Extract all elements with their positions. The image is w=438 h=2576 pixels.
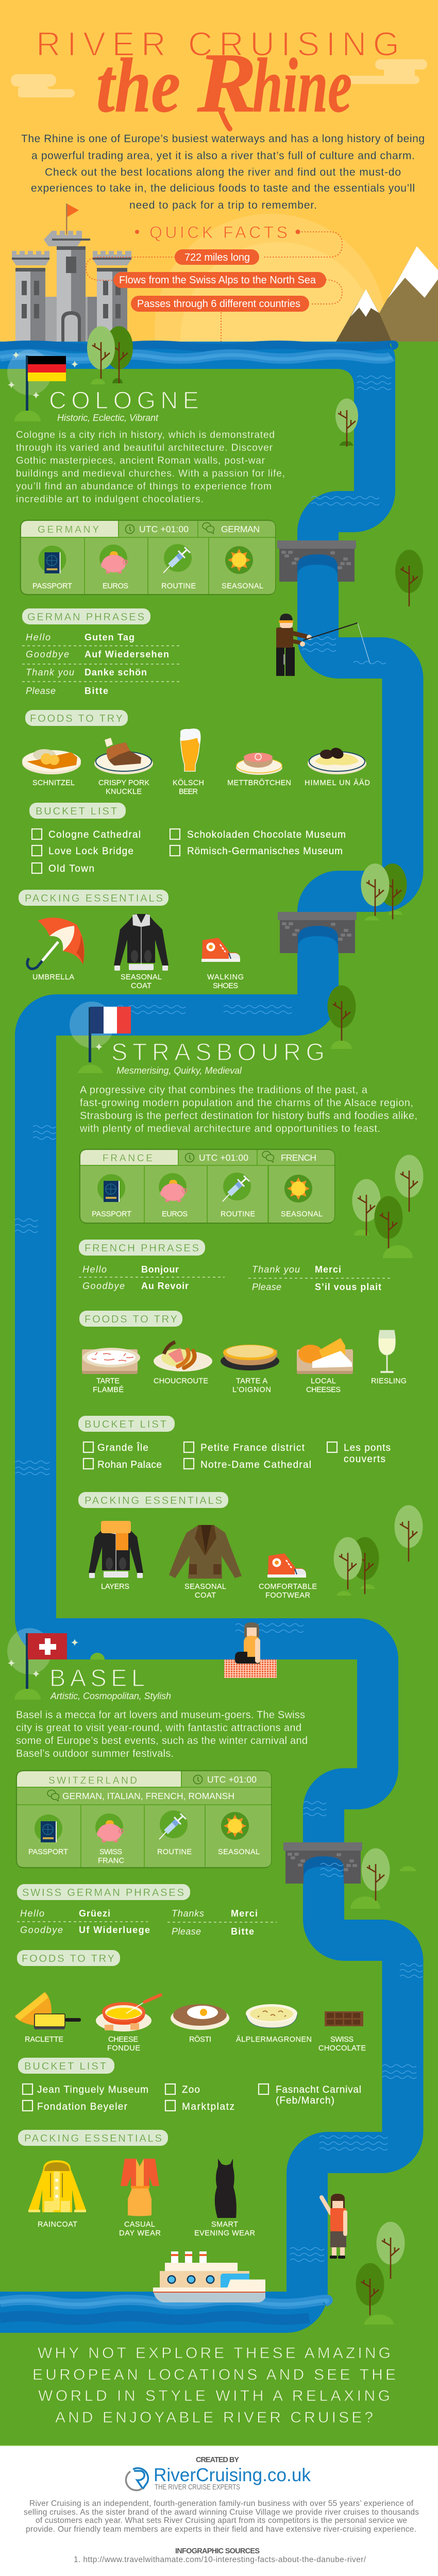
bucket list: Basel: [23, 2084, 361, 2112]
phrases: Swiss German: Merci: [231, 1908, 258, 1919]
icon: passport: [35, 1815, 62, 1842]
icon: piggy bank: [95, 1814, 123, 1842]
sun glow: [155, 214, 386, 446]
icon: syringe: [163, 544, 192, 573]
food labels: Strasbourg: L’OIGNON: [232, 1386, 271, 1394]
panel: Germany essentials: ROUTINE: [161, 582, 196, 590]
about text: River Cruising is an independent, fourth-generation family-run business with over 55 years’ experience of: [29, 2499, 414, 2508]
panel: Switzerland essentials: PASSPORT: [28, 1848, 68, 1856]
closing question: AND ENJOYABLE RIVER CRUISE?: [55, 2409, 373, 2426]
body: Strasbourg: A progressive city that combines the traditions of the past, a: [80, 1084, 368, 1096]
tree: by third bridge: [350, 1849, 416, 1909]
castle: [12, 204, 131, 342]
body: Strasbourg: [79, 1084, 417, 1134]
phrases: German: Guten Tag: [85, 632, 134, 642]
fact pill: 722 miles long: [175, 249, 259, 265]
trees: by second bridge: [361, 863, 407, 920]
panel: Switzerland essentials: SWISS: [99, 1848, 122, 1856]
phrases: German: Bitte: [85, 686, 108, 696]
packing labels: Strasbourg: [101, 1583, 317, 1600]
title: River Cruising: RIVER CRUISING: [36, 25, 399, 63]
item: casual day wear: [121, 2159, 159, 2216]
bucket list: Cologne: Römisch-Germanisches Museum: [187, 846, 343, 857]
tree: right of Cologne text: [335, 399, 358, 447]
body: Cologne: incredible art to indulgent chocolatiers.: [16, 494, 204, 505]
fact pill: 6 countries: Passes through 6 different countries: [137, 298, 300, 310]
phrases: Swiss German: [17, 1908, 277, 1937]
food labels: Basel: SWISS: [330, 2036, 353, 2044]
closing question: WORLD IN STYLE WITH A RELAXING: [38, 2387, 390, 2404]
flag: Germany: [7, 350, 78, 421]
heading: Cologne: COLOGNE: [49, 386, 199, 414]
food: swiss chocolate: [325, 2011, 363, 2026]
bucket list: Strasbourg: Petite France district: [200, 1443, 305, 1453]
flag: France: [70, 1002, 131, 1073]
phrases: French: Goodbye: [82, 1281, 125, 1291]
food labels: Strasbourg: [93, 1377, 407, 1394]
food: choucroute: [154, 1342, 212, 1371]
title: the Rhine: hine: [252, 43, 352, 128]
quick facts heading: QUICK FACTS: [149, 223, 288, 242]
bucket list: Basel: Fasnacht Carnival: [276, 2084, 361, 2095]
flag: Switzerland: [7, 1628, 105, 1700]
icon: passport: [97, 1174, 125, 1202]
food labels: Cologne: SCHNITZEL: [32, 779, 75, 787]
logo: RiverCruising.co.uk: [126, 2464, 311, 2492]
item: raincoat: [28, 2160, 86, 2212]
food labels: Strasbourg: TARTE A: [236, 1377, 267, 1385]
heading: foods, Strasbourg: FOODS TO TRY: [85, 1314, 177, 1325]
food: local cheeses: [297, 1338, 353, 1374]
food labels: Strasbourg: LOCAL: [311, 1377, 336, 1385]
body: Cologne: Cologne is a city rich in history, which is demonstrated: [16, 430, 275, 440]
item: walking shoes: [201, 938, 240, 962]
item: smart evening wear: [215, 2159, 237, 2218]
sources: INFOGRAPHIC SOURCES: [175, 2547, 260, 2555]
body: Basel: [16, 1709, 308, 1759]
body: Basel: Basel’s outdoor summer festivals.: [16, 1748, 174, 1759]
heading: foods, Cologne: FOODS TO TRY: [30, 713, 123, 724]
packing labels: Strasbourg: COAT: [195, 1591, 216, 1600]
heading: French phrases: FRENCH PHRASES: [85, 1243, 199, 1254]
logo: RiverCruising.co.uk: RiverCruising.co.uk: [154, 2464, 311, 2485]
icon: sun: [221, 1812, 249, 1840]
body: Basel: some of Europe’s best events, such as the winter carnival and: [16, 1735, 308, 1747]
icon: sun: [225, 546, 253, 574]
packing labels: Cologne: [32, 973, 244, 990]
icon: passport: [38, 546, 66, 573]
packing labels: Strasbourg: SEASONAL: [184, 1583, 226, 1591]
about text: [24, 2499, 419, 2534]
food: raclette: [15, 1992, 81, 2029]
bucket list: Basel: Fondation Beyeler: [37, 2102, 128, 2112]
packing labels: Strasbourg: FOOTWEAR: [265, 1591, 310, 1600]
food labels: Basel: RACLETTE: [25, 2036, 63, 2044]
intro text: Check out the best locations along the river and find out the must-do: [45, 166, 401, 178]
sources: [74, 2547, 366, 2564]
panel: France essentials: PASSPORT: [92, 1210, 131, 1218]
phrases: German: Goodbye: [26, 649, 69, 659]
packing labels: Cologne: SHOES: [213, 982, 238, 990]
panel: France essentials: ROUTINE: [221, 1210, 255, 1218]
bucket list: Basel: Jean Tinguely Museum: [37, 2084, 148, 2095]
bridge 1: [277, 540, 356, 582]
picnic girl: [224, 1622, 277, 1678]
heading: German phrases: GERMAN PHRASES: [27, 612, 144, 623]
body: Cologne: Gothic masterpieces, ancient Roman walls, post-war: [16, 455, 265, 466]
food labels: Cologne: KÖLSCH: [173, 778, 204, 787]
intro text: The Rhine is one of Europe’s busiest waterways and has a long history of being: [21, 133, 425, 145]
intro text: [21, 133, 425, 211]
title: the Rhine: the: [96, 43, 180, 128]
food labels: Basel: CHEESE: [108, 2036, 138, 2044]
heading: Swiss German phrases: [17, 1884, 190, 1900]
packing labels: Basel: RAINCOAT: [38, 2221, 77, 2229]
phrases: German: Hello: [26, 632, 50, 642]
panel: Germany essentials: [21, 520, 275, 595]
phrases: French: Au Revoir: [141, 1281, 189, 1291]
icon: syringe: [159, 1810, 188, 1839]
food: Kolsch beer: [180, 728, 201, 771]
panel: Switzerland essentials: ROUTINE: [157, 1848, 192, 1856]
panel: Switzerland essentials: [16, 1771, 271, 1868]
item: brown coat: [169, 1525, 242, 1579]
food labels: Basel: [25, 2035, 366, 2053]
bucket list: Cologne: Cologne Cathedral: [48, 829, 141, 840]
closing question: [32, 2345, 396, 2426]
phrases: German: Danke schön: [85, 667, 147, 677]
food labels: Cologne: [32, 778, 370, 796]
food labels: Strasbourg: FLAMBÉ: [93, 1385, 124, 1394]
castle-side trees: [87, 326, 133, 384]
tagline: Basel: Artistic, Cosmopolitan, Stylish: [50, 1691, 171, 1701]
food: mettbrotchen: [236, 753, 282, 775]
heading: French phrases: [79, 1240, 205, 1256]
intro text: need to pack for a trip to remember.: [129, 199, 317, 211]
panel: France essentials: EUROS: [162, 1210, 188, 1218]
packing labels: Cologne: UMBRELLA: [32, 973, 74, 981]
panel: Switzerland essentials: GERMAN, ITALIAN, FRENCH, ROMANSH: [62, 1791, 234, 1801]
waving girl: [322, 2194, 347, 2259]
heading: Basel: BASEL: [49, 1664, 145, 1691]
item: umbrella: [27, 918, 85, 969]
panel: France essentials: [80, 1149, 334, 1223]
packing labels: Basel: [38, 2221, 255, 2238]
heading: bucket list, Strasbourg: BUCKET LIST: [85, 1419, 166, 1430]
body: Strasbourg: with plenty of medieval architecture and opportunities to feast.: [79, 1123, 380, 1134]
closing question: WHY NOT EXPLORE THESE AMAZING: [38, 2345, 391, 2362]
panel: Germany essentials: PASSPORT: [32, 582, 72, 590]
food: crispy pork knuckle: [94, 738, 153, 774]
phrases: German: Auf Wiedersehen: [85, 649, 169, 659]
food: himmel un aad: [308, 745, 366, 774]
bucket list: Strasbourg: Les ponts: [344, 1443, 391, 1453]
phrases: French: Thank you: [252, 1264, 300, 1275]
packing labels: Basel: DAY WEAR: [119, 2229, 161, 2238]
packing labels: Cologne: COAT: [131, 982, 151, 990]
phrases: French: [79, 1264, 391, 1292]
trees: right of France panel: [352, 1155, 424, 1258]
food labels: Strasbourg: CHEESES: [306, 1386, 341, 1394]
heading: foods, Basel: FOODS TO TRY: [22, 1953, 114, 1964]
packing labels: Strasbourg: COMFORTABLE: [259, 1583, 317, 1591]
phrases: German: Thank you: [26, 667, 74, 677]
heading: packing, Cologne: [19, 890, 169, 906]
item: comfortable footwear: [267, 1553, 306, 1578]
bucket list: Strasbourg: Notre-Dame Cathedral: [200, 1460, 311, 1470]
heading: German phrases: [22, 608, 150, 624]
fact pill: Swiss Alps to North Sea: Flows from the Swiss Alps to the North Sea: [119, 275, 316, 286]
food labels: Basel: RÖSTI: [189, 2035, 211, 2044]
panel: Switzerland essentials: FRANC: [98, 1857, 124, 1865]
tree: above Strasbourg: [328, 985, 356, 1049]
phrases: Swiss German: Hello: [20, 1908, 44, 1919]
heading: Swiss German phrases: SWISS GERMAN PHRASES: [22, 1887, 184, 1899]
heading: packing, Basel: PACKING ESSENTIALS: [24, 2133, 162, 2144]
food labels: Strasbourg: RIESLING: [371, 1377, 407, 1385]
panel: France essentials: FRENCH: [281, 1153, 316, 1163]
phrases: Swiss German: Please: [172, 1926, 201, 1937]
panel: France essentials: UTC +01:00: [199, 1153, 248, 1163]
food labels: Basel: CHOCOLATE: [318, 2044, 366, 2053]
intro text: experiences to take in, the delicious foods to taste and the essentials you’ll: [31, 182, 415, 194]
sky background: [0, 0, 438, 345]
cruise boat: [153, 2251, 265, 2302]
body: Basel: city is great to visit year-round, with fantastic attractions and: [16, 1722, 301, 1734]
bucket list: Strasbourg: Grande Île: [97, 1442, 148, 1453]
tagline: Strasbourg: Mesmerising, Quirky, Medieval: [116, 1065, 242, 1076]
icon: syringe: [223, 1173, 251, 1201]
fisherman: [276, 614, 386, 676]
river: [0, 342, 403, 2319]
phrases: Swiss German: Grüezi: [79, 1908, 110, 1919]
panel: France essentials: SEASONAL: [281, 1210, 323, 1218]
heading: bucket list, Cologne: BUCKET LIST: [36, 806, 117, 817]
closing question: EUROPEAN LOCATIONS AND SEE THE: [32, 2366, 396, 2383]
title: the Rhine: [96, 36, 352, 130]
body: Cologne: [16, 430, 285, 505]
trees: right of Strasbourg packing: [334, 1505, 423, 1596]
heading: packing, Strasbourg: PACKING ESSENTIALS: [85, 1495, 222, 1506]
river ripples: [15, 376, 423, 2262]
bucket list: Basel: Zoo: [182, 2084, 200, 2095]
about text: of customers each year. What sets River Cruising apart from its competitors is the personal service we: [36, 2516, 407, 2525]
phrases: Swiss German: Thanks: [172, 1908, 204, 1919]
phrases: Swiss German: Uf Widerluege: [79, 1925, 150, 1935]
food labels: Cologne: HIMMEL UN ÄÄD: [305, 778, 370, 787]
food: schnitzel: [22, 749, 81, 774]
bridge 3: [283, 1842, 362, 1884]
heading: bucket list, Cologne: [29, 803, 126, 819]
food: tarte flambee: [82, 1348, 140, 1374]
body: Strasbourg: fast-growing modern population and the charms of the Alsace region,: [80, 1097, 413, 1109]
food labels: Cologne: CRISPY PORK: [98, 779, 149, 787]
heading: packing, Strasbourg: [78, 1492, 228, 1508]
panel: Switzerland essentials: SWITZERLAND: [48, 1775, 137, 1786]
heading: bucket list, Strasbourg: [78, 1416, 175, 1432]
panel: Germany essentials: GERMAN: [221, 524, 260, 534]
packing labels: Basel: CASUAL: [124, 2221, 155, 2229]
icon: sun: [284, 1175, 312, 1202]
body: Strasbourg: Strasbourg is the perfect destination for history buffs and foodies alike,: [80, 1110, 417, 1122]
food labels: Basel: FONDUE: [107, 2044, 140, 2053]
phrases: Swiss German: Bitte: [231, 1926, 254, 1937]
footer background: [0, 2445, 438, 2576]
heading: foods, Cologne: [25, 710, 128, 726]
bucket list: Cologne: [32, 829, 346, 874]
trees: by waving girl: [356, 2222, 405, 2325]
food labels: Strasbourg: TARTE: [96, 1377, 120, 1385]
panel: Germany essentials: EUROS: [103, 582, 128, 590]
phrases: French: Bonjour: [141, 1264, 179, 1275]
intro text: a powerful trading area, yet it is also a river that’s full of culture and charm.: [31, 150, 415, 162]
packing labels: Basel: EVENING WEAR: [194, 2229, 255, 2238]
panel: Germany essentials: UTC +01:00: [139, 524, 189, 534]
phrases: French: Hello: [82, 1264, 107, 1275]
bridge 2: [278, 912, 357, 953]
tagline: Cologne: Historic, Eclectic, Vibrant: [57, 413, 159, 423]
heading: packing, Basel: [18, 2130, 168, 2146]
food: tarte a l'oignon: [221, 1345, 279, 1370]
body: Basel: Basel is a mecca for art lovers and museum-goers. The Swiss: [16, 1709, 305, 1721]
phrases: German: [22, 632, 180, 696]
heading: Strasbourg: STRASBOURG: [111, 1038, 325, 1065]
packing labels: Cologne: SEASONAL: [121, 973, 162, 981]
created by: CREATED BY: [196, 2456, 239, 2464]
body: Cologne: you’ll find an abundance of things to experience from: [16, 481, 272, 492]
bucket list: Cologne: Old Town: [48, 863, 94, 874]
phrases: French: Please: [252, 1282, 281, 1292]
dotted connectors: [86, 232, 342, 342]
icon: piggy bank: [159, 1173, 187, 1202]
body: Cologne: buildings and medieval churches. With a passion for life,: [16, 468, 285, 479]
fact pill: 6 countries: [131, 296, 309, 312]
panel: France essentials: FRANCE: [103, 1153, 153, 1164]
panel: Switzerland essentials: UTC +01:00: [207, 1774, 257, 1785]
mountains: [336, 246, 438, 342]
bucket list: Strasbourg: couverts: [344, 1454, 385, 1465]
food: alplermagronen: [246, 2004, 297, 2028]
food labels: Cologne: KNUCKLE: [106, 788, 142, 796]
packing labels: Basel: SMART: [211, 2221, 238, 2229]
food: riesling: [379, 1330, 395, 1373]
panel: Germany essentials: GERMANY: [38, 524, 99, 535]
packing labels: Strasbourg: LAYERS: [101, 1583, 129, 1591]
phrases: German: Please: [26, 686, 56, 696]
phrases: French: Merci: [315, 1264, 341, 1275]
heading: bucket list, Basel: [18, 2058, 114, 2074]
item: jacket: [114, 914, 169, 971]
panel: Germany essentials: SEASONAL: [222, 582, 263, 590]
food labels: Basel: ÄLPLERMAGRONEN: [236, 2035, 312, 2044]
tree: by first bridge: [395, 550, 423, 606]
food labels: Strasbourg: CHOUCROUTE: [154, 1377, 208, 1385]
about text: provide. Our friendly team members are experts in their field and have extensive river-cruising experience.: [26, 2525, 416, 2534]
heading: foods, Strasbourg: [79, 1311, 182, 1327]
clouds: [11, 59, 427, 97]
food labels: Cologne: BEER: [179, 788, 198, 796]
phrases: French: S’il vous plait: [315, 1282, 381, 1292]
food labels: Cologne: METTBRÖTCHEN: [227, 778, 291, 787]
bucket list: Cologne: Love Lock Bridge: [48, 846, 133, 857]
bucket list: Strasbourg: Rohan Palace: [97, 1460, 162, 1470]
bucket list: Basel: (Feb/March): [276, 2095, 334, 2106]
item: layers: [89, 1521, 143, 1578]
logo: RiverCruising.co.uk: THE RIVER CRUISE EXPERTS: [155, 2483, 240, 2492]
title: the Rhine: R: [197, 36, 257, 130]
heading: foods, Basel: [17, 1950, 120, 1966]
sources: 1. http://www.travelwithamate.com/10-interesting-facts-about-the-danube-river/: [74, 2555, 366, 2564]
heading: bucket list, Basel: BUCKET LIST: [24, 2061, 106, 2072]
heading: packing, Cologne: PACKING ESSENTIALS: [25, 893, 163, 904]
about text: selling cruises. As the sister brand of the award winning Cruise Village we provide river cruises to thousands: [24, 2508, 419, 2517]
packing labels: Cologne: WALKING: [207, 973, 244, 981]
bucket list: Basel: Marktplatz: [182, 2102, 234, 2112]
icon: piggy bank: [99, 545, 127, 573]
body: Cologne: through its varied and beautiful architecture. Discover: [16, 443, 273, 453]
bucket list: Strasbourg: [83, 1442, 391, 1470]
fact pill: 722 miles long: 722 miles long: [184, 252, 250, 263]
panel: Switzerland essentials: SEASONAL: [218, 1848, 260, 1856]
food: rosti: [171, 2004, 229, 2030]
food: cheese fondue: [96, 1995, 161, 2031]
phrases: Swiss German: Goodbye: [20, 1925, 63, 1935]
fact pill: Swiss Alps to North Sea: [113, 272, 326, 288]
bucket list: Cologne: Schokoladen Chocolate Museum: [187, 829, 346, 840]
